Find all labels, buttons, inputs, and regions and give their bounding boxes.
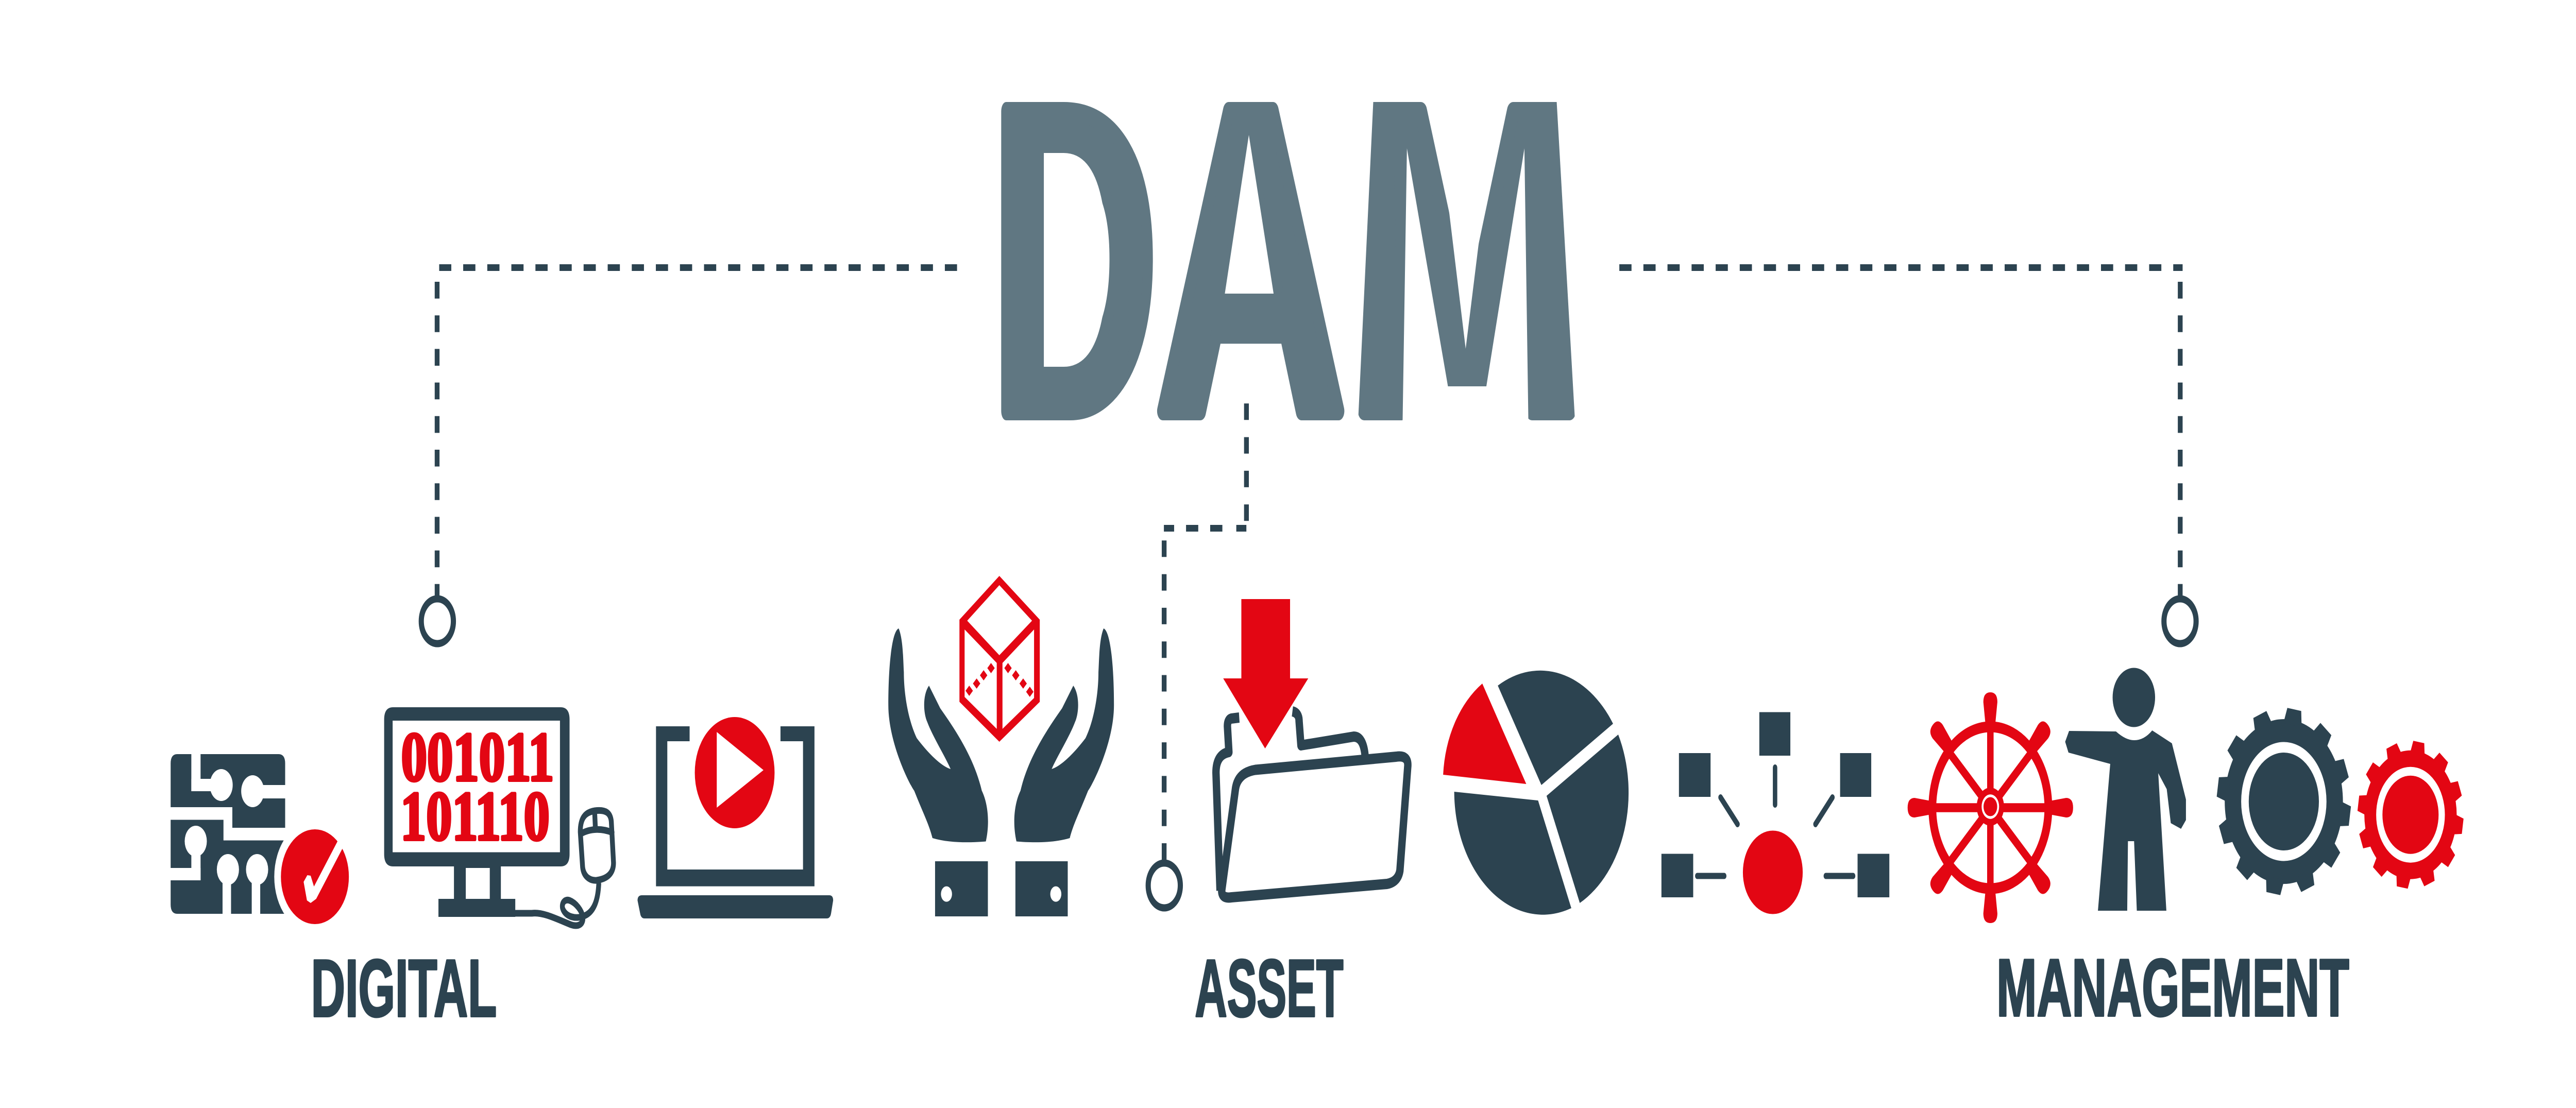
icon: hub and spoke network xyxy=(1662,712,1889,914)
icon: manager figure pointing xyxy=(2065,668,2186,911)
label: DIGITAL: DIGITAL xyxy=(311,944,497,1034)
connector: DAM to Management xyxy=(1619,268,2196,644)
icon: ship steering wheel xyxy=(1908,692,2073,923)
binary digits xyxy=(400,718,554,855)
label: MANAGEMENT: MANAGEMENT xyxy=(1996,943,2349,1033)
left hand xyxy=(888,628,988,842)
red cube xyxy=(959,576,1040,742)
title: DAM: A xyxy=(1156,16,1346,503)
connector: DAM to Digital xyxy=(421,268,957,644)
icon: dark gear xyxy=(2216,707,2351,896)
label: ASSET: ASSET xyxy=(1195,944,1344,1034)
cuffs xyxy=(935,861,988,916)
title: DAM xyxy=(991,16,1589,504)
title: DAM: M xyxy=(1345,16,1589,503)
icon: pie chart xyxy=(1443,671,1629,915)
icon: circuit board with check mark xyxy=(169,752,355,933)
icon: computer monitor with binary code and mouse xyxy=(384,707,614,926)
icon: red gear xyxy=(2357,740,2464,889)
connector: DAM to Asset xyxy=(1148,403,1246,908)
binary digits: 101110 xyxy=(400,777,550,855)
mouse and cord xyxy=(515,810,614,926)
right hand xyxy=(1014,628,1114,842)
icon: folder with download arrow xyxy=(1216,599,1408,897)
icon: hands holding a cube xyxy=(888,576,1114,916)
binary digits: 001011 xyxy=(401,718,554,796)
title: DAM: D xyxy=(991,16,1158,504)
icon: laptop with play button xyxy=(637,717,833,918)
